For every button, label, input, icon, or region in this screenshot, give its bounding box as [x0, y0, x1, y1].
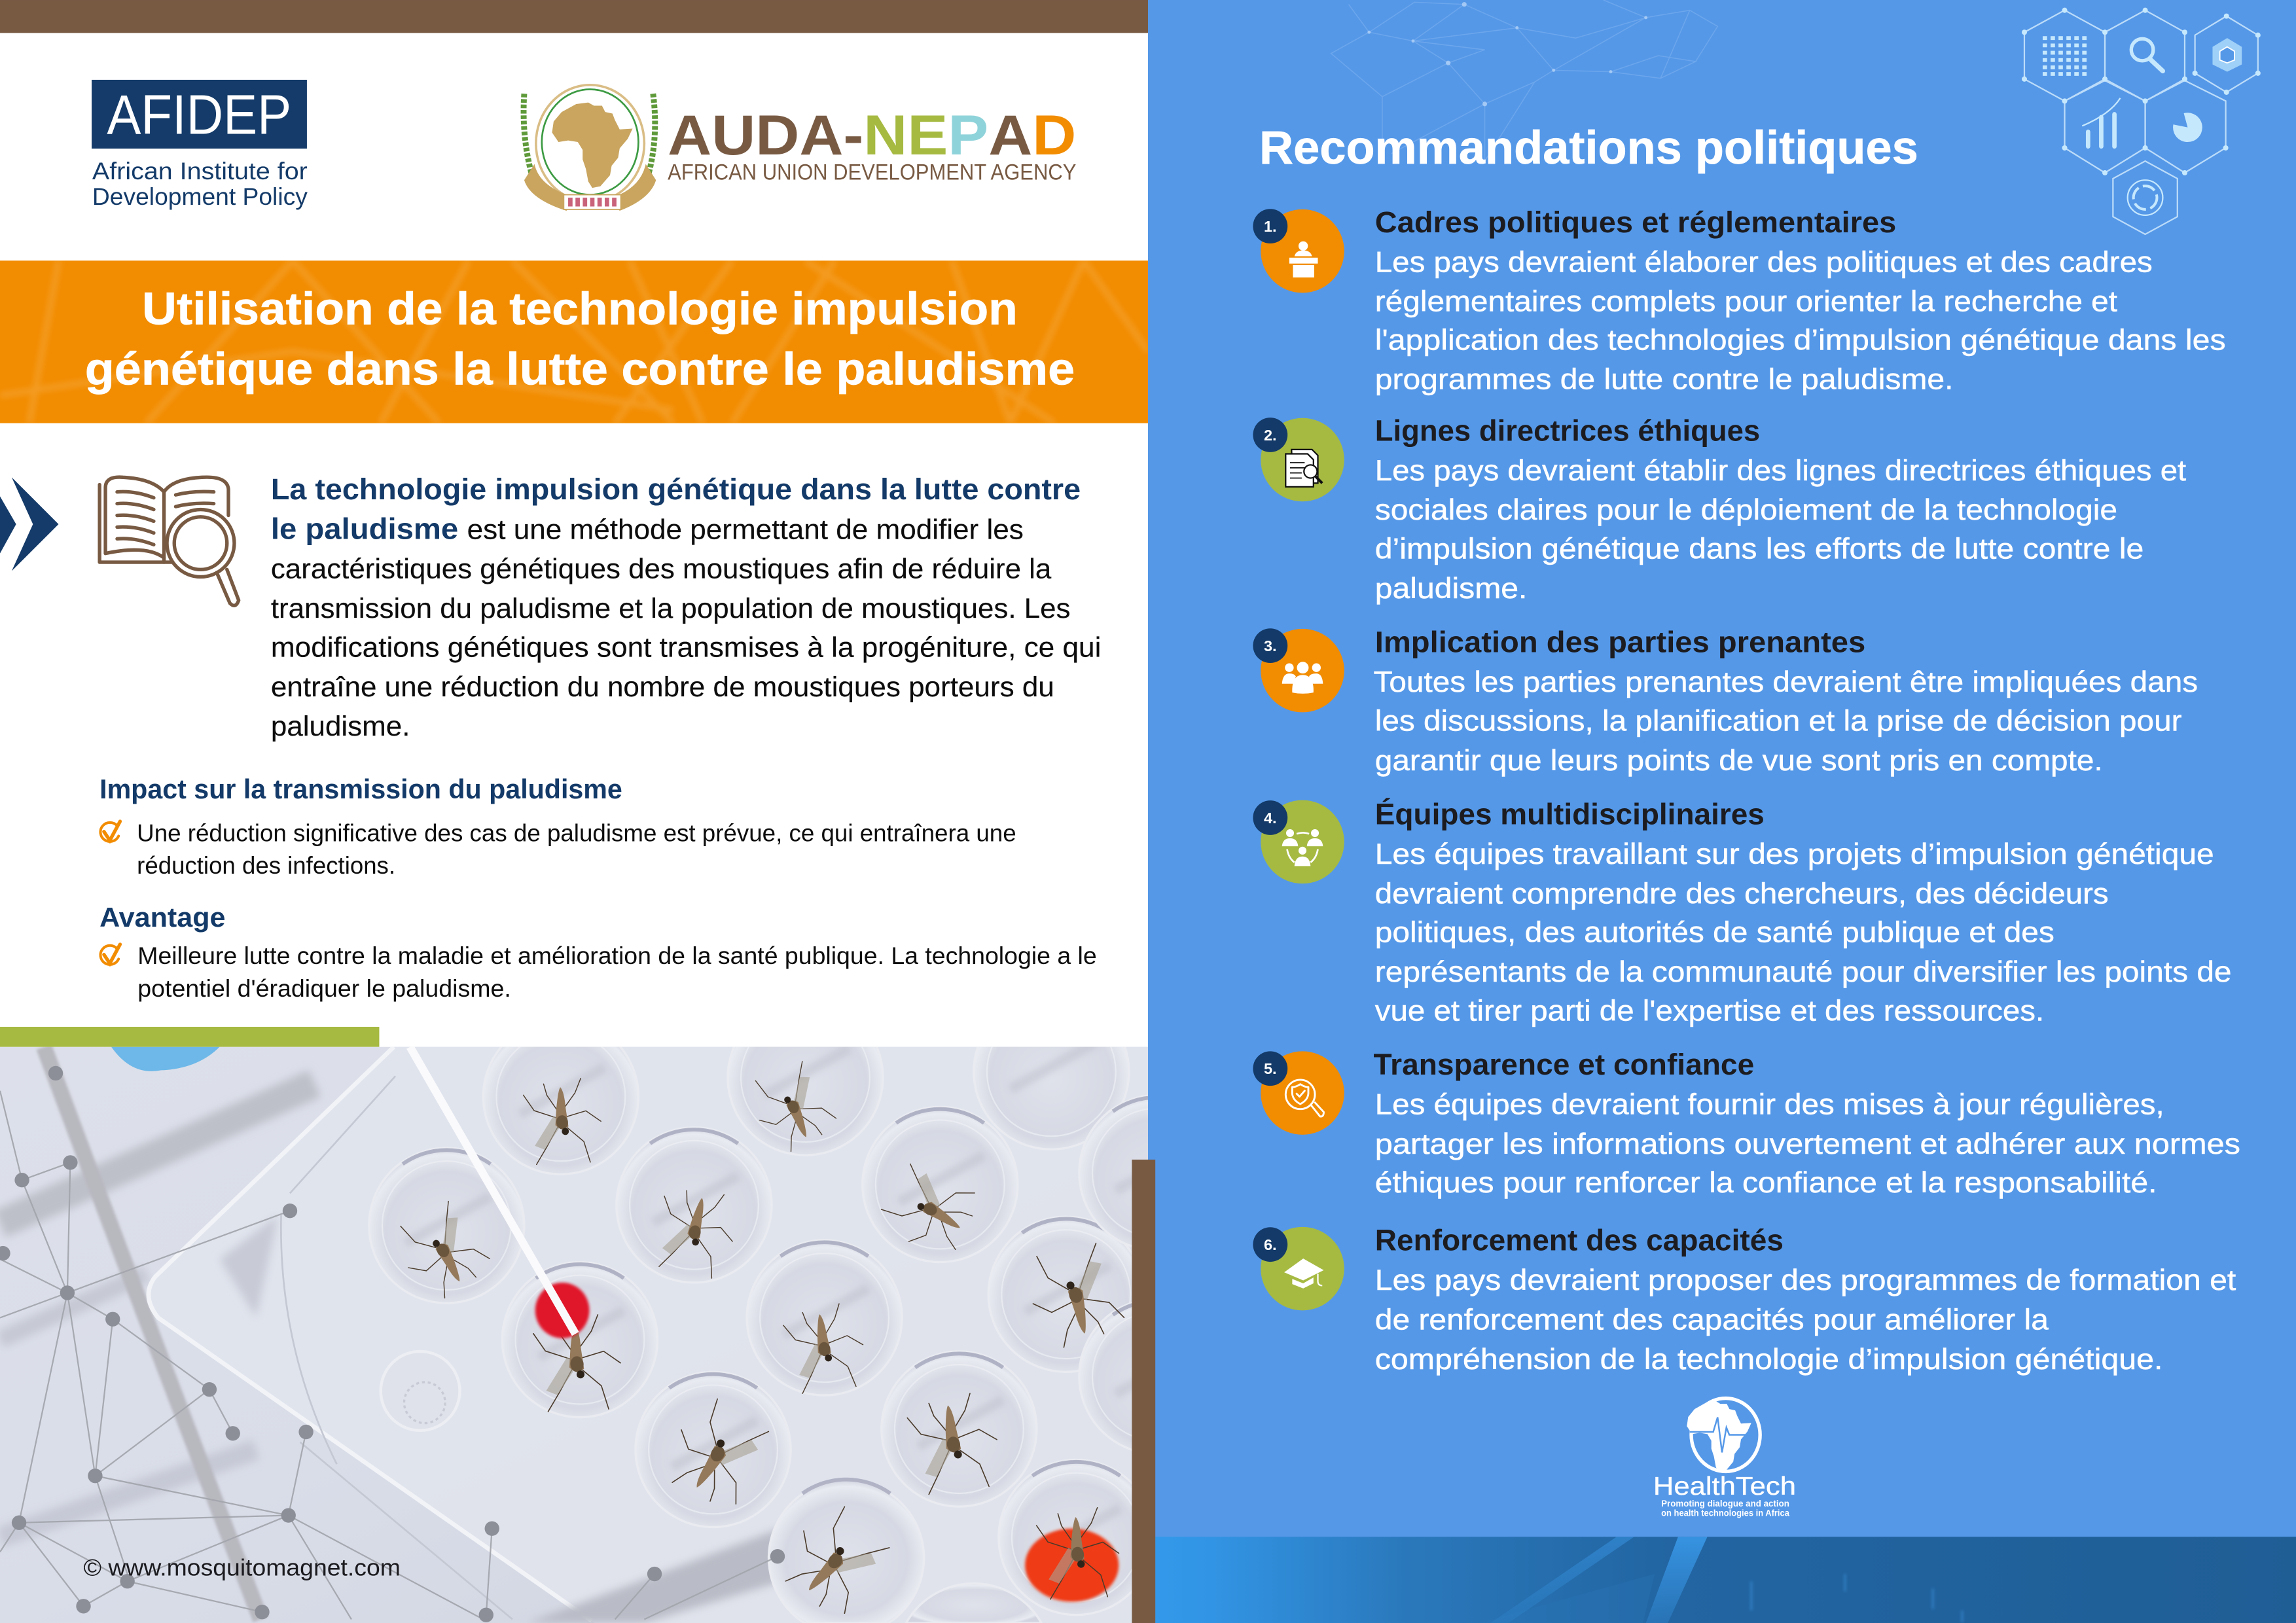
intro text: le paludisme [271, 511, 458, 545]
logo: AFIDEP: Development Policy [92, 183, 308, 210]
bullet text [137, 819, 1016, 879]
top brown bar [0, 0, 1148, 33]
item 6 text: de renforcement des capacités pour améliorer la [1375, 1303, 2049, 1336]
logo: HealthTech: Promoting dialogue and action [1661, 1499, 1789, 1508]
intro text: caractéristiques génétiques des moustiques afin de réduire la [271, 554, 1052, 585]
item 3 [1253, 625, 2198, 777]
bullet text [137, 942, 1097, 1002]
title text: Utilisation de la technologie impulsion [142, 283, 1018, 334]
item 5 text: partager les informations ouvertement et adhérer aux normes [1375, 1128, 2240, 1160]
icon: lectern on orange circle: 1. [1264, 218, 1277, 235]
intro text [271, 472, 1101, 742]
logo: HealthTech: HealthTech [1653, 1472, 1796, 1501]
heading: impact: Impact sur la transmission du paludisme [99, 774, 622, 804]
item 1 text: réglementaires complets pour orienter la recherche et [1375, 285, 2118, 317]
item 4 text [1375, 797, 2232, 1027]
decorative network [1331, 0, 1717, 161]
logo: AFIDEP: AFIDEP [107, 84, 291, 146]
title banner [0, 260, 1148, 423]
tray [149, 1047, 1155, 1623]
icon: team network on green circle: 4. [1264, 810, 1277, 827]
bullet text: réduction des infections. [137, 851, 395, 879]
bullet text: Meilleure lutte contre la maladie et amélioration de la santé publique. La technologie a le [137, 942, 1097, 969]
item 5 [1253, 1047, 2240, 1199]
intro text: La technologie impulsion génétique dans la lutte contre [271, 472, 1081, 506]
intro text: modifications génétiques sont transmises à la progéniture, ce qui [271, 633, 1101, 664]
heading: avantage: Avantage [99, 902, 226, 933]
item 3 text: les discussions, la planification et la prise de décision pour [1375, 704, 2182, 737]
item 2 text: paludisme. [1375, 572, 1527, 605]
logo: AUDA-NEPAD [524, 85, 1076, 211]
item 6 [1253, 1223, 2236, 1376]
logo: AFIDEP [92, 80, 308, 210]
item 1 text: Les pays devraient élaborer des politiques et des cadres [1375, 245, 2153, 278]
title text: génétique dans la lutte contre le paludisme [85, 343, 1075, 394]
icon: document review on green circle: 2. [1264, 427, 1277, 444]
item 6 text: Renforcement des capacités [1375, 1223, 1784, 1257]
bullet text: potentiel d'éradiquer le paludisme. [137, 974, 511, 1002]
photo credit: © www.mosquitomagnet.com [84, 1554, 401, 1580]
intro text: est une méthode permettant de modifier les [467, 514, 1024, 545]
wordmark: AUDA- NEPAD [668, 104, 1076, 167]
item 6 text: Les pays devraient proposer des programmes de formation et [1375, 1264, 2236, 1296]
item 4 text: Les équipes travaillant sur des projets d’impulsion génétique [1375, 838, 2214, 870]
icon: shield magnifier on orange circle [1253, 1051, 1344, 1135]
logo: HealthTech [1653, 1399, 1796, 1518]
item 6 text [1375, 1223, 2236, 1376]
item 4 text: politiques, des autorités de santé publique et des [1375, 916, 2054, 949]
item 3 text [1374, 625, 2198, 777]
icon: open book with magnifier [99, 477, 239, 605]
icon: team network on green circle [1253, 800, 1344, 883]
panel: left page [0, 0, 1234, 1623]
item 5 text: éthiques pour renforcer la confiance et la responsabilité. [1375, 1166, 2157, 1199]
item 4 text: vue et tirer parti de l'expertise et des ressources. [1375, 994, 2044, 1027]
section: impact [99, 774, 1016, 879]
wells [369, 994, 1234, 1623]
item 4 text: représentants de la communauté pour diversifier les points de [1375, 955, 2232, 988]
item 4 text: Équipes multidisciplinaires [1375, 797, 1765, 831]
item 2 text: d’impulsion génétique dans les efforts de lutte contre le [1375, 533, 2144, 565]
bullet text: Une réduction significative des cas de paludisme est prévue, ce qui entraînera une [137, 819, 1016, 847]
bottom gradient band [1155, 1537, 2296, 1623]
green accent bar [0, 1027, 379, 1047]
item 2 [1253, 413, 2187, 605]
title text [85, 283, 1075, 394]
item 2 text: sociales claires pour le déploiement de la technologie [1375, 493, 2117, 526]
agency name: AFRICAN UNION DEVELOPMENT AGENCY [668, 160, 1076, 185]
item 2 text: Lignes directrices éthiques [1375, 413, 1760, 447]
icon: orange check [100, 821, 120, 842]
item 1 [1253, 205, 2226, 396]
icon: chevrons [0, 477, 58, 571]
item 3 text: Implication des parties prenantes [1375, 625, 1865, 659]
item 4 [1253, 797, 2232, 1027]
photo: mosquitoes in a tray [0, 1047, 1148, 1623]
network overlay [0, 1091, 778, 1619]
logo: HealthTech: on health technologies in Africa [1661, 1508, 1789, 1518]
item 1 text: programmes de lutte contre le paludisme. [1375, 363, 1953, 396]
item 2 text: Les pays devraient établir des lignes directrices éthiques et [1375, 454, 2187, 487]
panel: policy recommendations [1132, 0, 2296, 1623]
item 1 text [1375, 205, 2226, 396]
icon: people on orange circle: 3. [1264, 637, 1277, 654]
item 5 text: Transparence et confiance [1374, 1047, 1754, 1081]
African Union emblem [524, 85, 656, 211]
section: avantage [99, 902, 1097, 1002]
icon: document review on green circle [1253, 418, 1344, 501]
item 1 text: l'application des technologies d’impulsion génétique dans les [1375, 324, 2226, 357]
icon: people on orange circle [1253, 628, 1344, 712]
icon: shield magnifier on orange circle: 5. [1264, 1060, 1277, 1077]
item 1 text: Cadres politiques et réglementaires [1375, 205, 1896, 239]
item 3 text: garantir que leurs points de vue sont pris en compte. [1375, 744, 2103, 777]
item 5 text: Les équipes devraient fournir des mises à jour régulières, [1375, 1088, 2164, 1121]
item 6 text: compréhension de la technologie d’impulsion génétique. [1375, 1343, 2162, 1376]
icon: lectern on orange circle [1253, 209, 1344, 293]
intro text: paludisme. [271, 711, 410, 742]
intro text: transmission du paludisme et la population de moustiques. Les [271, 594, 1070, 624]
icon: graduation cap on green circle [1253, 1227, 1344, 1310]
icon: hexagon tech cluster [2022, 8, 2261, 234]
icon: graduation cap on green circle: 6. [1264, 1236, 1277, 1253]
intro text: entraîne une réduction du nombre de moustiques porteurs du [271, 672, 1054, 703]
item 4 text: devraient comprendre des chercheurs, des décideurs [1375, 877, 2109, 910]
logo: AFIDEP: African Institute for [92, 158, 308, 185]
item 2 text [1375, 413, 2187, 605]
right brown bar [1132, 1160, 1155, 1623]
heading: Recommandations politiques [1259, 122, 1918, 174]
item 3 text: Toutes les parties prenantes devraient être impliquées dans [1374, 666, 2198, 698]
icon: orange check [100, 944, 120, 965]
red sample drops and swab [410, 1047, 1122, 1602]
item 5 text [1374, 1047, 2240, 1199]
mosquitoes [388, 1057, 1128, 1623]
